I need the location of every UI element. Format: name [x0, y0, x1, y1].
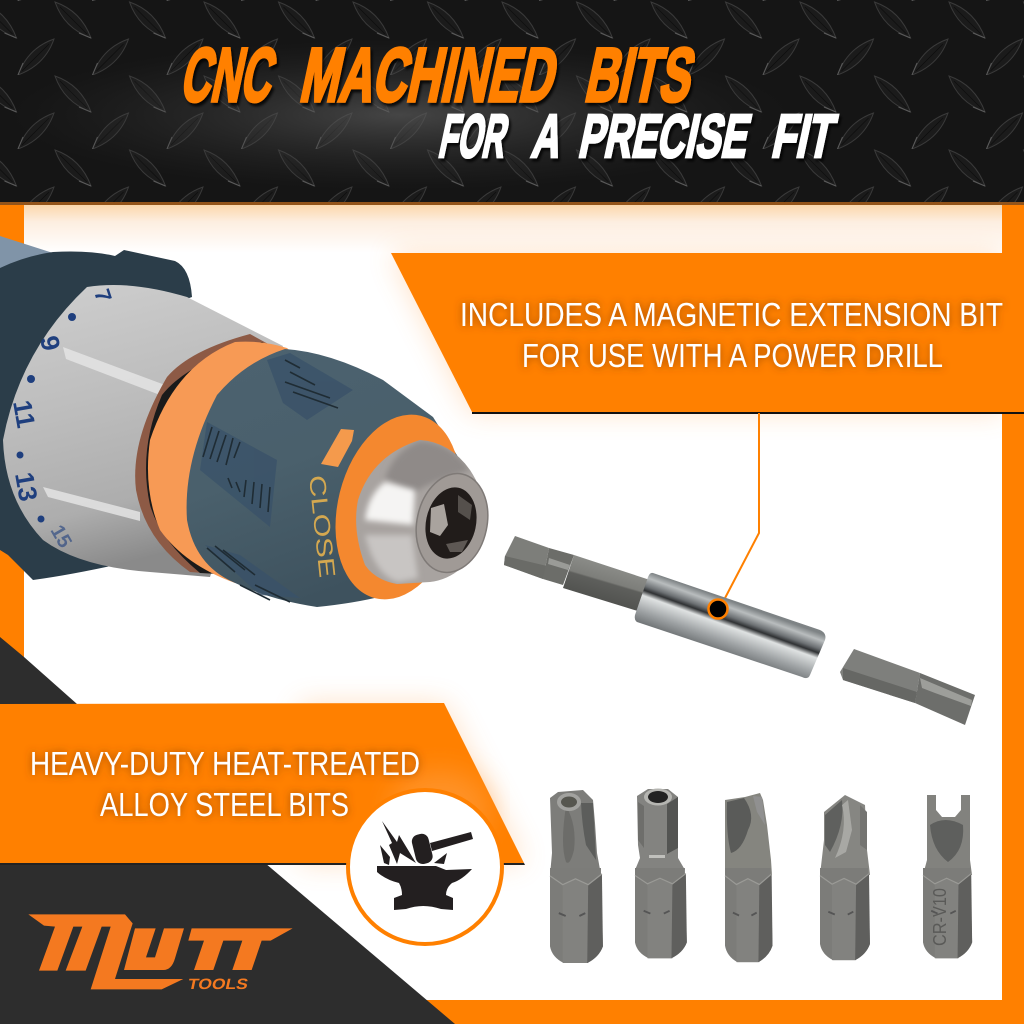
- callout glow: top: [391, 253, 1002, 412]
- chuck grooves: [203, 360, 338, 602]
- title line 2: FIT: [767, 103, 842, 171]
- callout: magnetic extension bit: [391, 253, 1024, 414]
- CLOSE label: CLOSE: [304, 474, 341, 579]
- nose face ring: [407, 467, 497, 579]
- title line 1: CNC: [175, 33, 284, 118]
- torque numbers: 9: [34, 333, 66, 353]
- bit 5: spanner tip: [923, 795, 972, 958]
- magnetic sleeve: [635, 573, 825, 678]
- title line 1: MACHINED: [294, 33, 566, 118]
- panel top peach fade: [24, 205, 1002, 253]
- callout text: HEAVY-DUTY HEAT-TREATED: [30, 745, 420, 782]
- extension bit: [504, 536, 825, 678]
- sparks: [380, 821, 447, 865]
- torque numbers: 7: [89, 286, 117, 305]
- silver torque ring: [3, 285, 283, 577]
- callout text: ALLOY STEEL BITS: [100, 786, 349, 823]
- logo: Mutt Tools: [28, 914, 293, 993]
- callout dot: [708, 600, 728, 618]
- callout text: FOR USE WITH A POWER DRILL: [522, 337, 943, 374]
- chuck arrow mark: [321, 429, 354, 467]
- neck: [543, 548, 574, 585]
- title line 2: [434, 103, 842, 171]
- torque numbers: 11: [7, 398, 41, 430]
- logo wordmark: TOOLS: [186, 976, 250, 993]
- title line 2: FOR: [434, 103, 515, 171]
- brown ring: [135, 334, 270, 575]
- panel right orange strip restored: [1002, 205, 1024, 1024]
- dark corner triangle: [0, 637, 77, 704]
- callout text: [30, 745, 420, 823]
- bit 3: scooped tip: [725, 793, 773, 962]
- title line 1: BITS: [579, 33, 703, 118]
- title line 2: A: [527, 103, 570, 171]
- torque numbers: [7, 286, 117, 552]
- black gap: [146, 342, 280, 575]
- nose silver cone: [356, 440, 477, 584]
- callout: heat-treated steel: [0, 703, 525, 865]
- drill rear housing: [0, 236, 53, 270]
- orange ring: [148, 342, 300, 583]
- torque numbers: 13: [9, 470, 44, 504]
- torque numbers: 15: [46, 522, 76, 552]
- hammer: [410, 832, 473, 866]
- leader line: [724, 413, 759, 600]
- chuck grip panels: [200, 353, 353, 598]
- chuck body: [187, 349, 460, 607]
- bit 1: security torx: [550, 790, 603, 963]
- hex drive end: [504, 536, 549, 579]
- nose hole: [419, 483, 483, 563]
- header band: diamond plate: [0, 0, 1024, 205]
- torque ring ridges: [43, 347, 165, 521]
- drill collar: [0, 250, 192, 580]
- callout glow: lower: [300, 704, 524, 863]
- hex pin: [430, 495, 472, 552]
- callout text: [460, 296, 1003, 374]
- logo mark: [28, 914, 293, 989]
- white content panel: [24, 205, 1002, 1000]
- title line 2: PRECISE: [574, 103, 757, 171]
- orange frame background: [0, 205, 1024, 1024]
- loose torx bit: [840, 649, 975, 725]
- icon: anvil and hammer badge: [348, 790, 502, 944]
- bit marking: CR-V10: [930, 888, 950, 946]
- bit 2: security hex: [635, 788, 687, 958]
- bit 4: fluted tip: [820, 795, 870, 960]
- dark logo panel: [0, 863, 455, 1024]
- anvil: [377, 866, 472, 910]
- drill: [0, 236, 497, 613]
- nose orange ring: [317, 401, 479, 613]
- title: [175, 33, 842, 171]
- hex shaft: [563, 555, 650, 612]
